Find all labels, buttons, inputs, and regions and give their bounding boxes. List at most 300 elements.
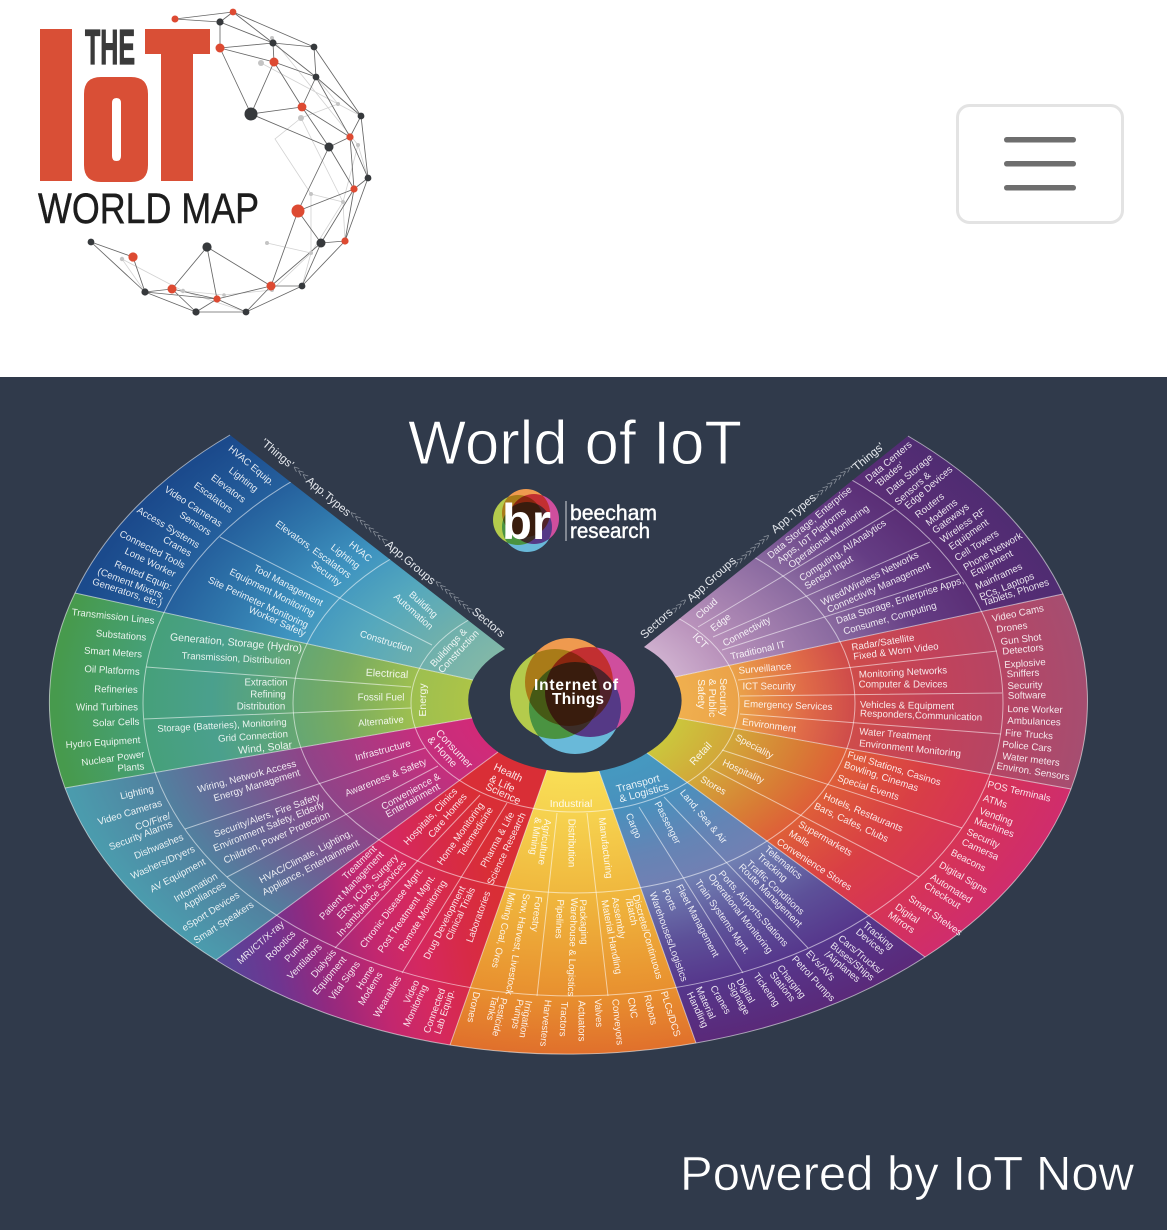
labels: transport: Material [693,985,717,1021]
central label [534,677,619,708]
panel: consumer and home [65,718,498,960]
labels: security: Monitoring Networks [859,665,948,681]
labels: security: Drones [996,620,1028,636]
panel: health and life science [216,752,547,1045]
labels: buildings: HVAC Equip. [226,444,276,488]
labels: buildings: Security [309,559,343,589]
labels: retail: Beacons [949,848,987,875]
labels: ICT: Cell Towers [953,528,1001,564]
labels: retail: Machines [973,816,1016,840]
labels: transport: Ticketing [750,971,782,1009]
labels: health: Lab Equip. [433,988,457,1036]
labels: health: Post Treatment Mgnt. [376,873,438,955]
labels: transport: Ports [659,887,679,913]
labels: health: Monitoring [401,983,431,1029]
labels: buildings: Escalators [191,480,235,516]
panel: buildings and construction [75,435,505,680]
labels: health: Pumps [283,935,311,965]
labels: security: Fire Trucks [1005,728,1053,742]
labels: security: Security [1007,680,1043,692]
labels: transport: & Logistics [618,781,670,805]
wedge: ICT [644,436,1063,677]
labels: security: Surveillance [738,661,792,677]
labels: security: Safety [695,679,707,710]
panel: energy [49,593,473,788]
labels: energy: Electrical [365,667,409,681]
labels: consumer: Energy Management [212,768,302,804]
labels: industrial: & Mining [527,817,543,855]
panel: transport and logistics [599,753,925,1043]
labels: retail: Malls [786,828,812,850]
labels: security: ICT Security [742,682,796,692]
labels: ICT: Tablets, Phones [982,577,1051,609]
edge caption right: >>> [670,596,690,616]
wedge: buildings [75,435,505,680]
labels: consumer: Information [172,871,220,905]
labels: health: Ventilators [285,942,325,982]
labels: transport: Land, Sea & Air [677,788,729,847]
labels: health [235,761,529,1036]
title: World of IoT [408,409,742,478]
labels: industrial: Drones [464,991,482,1024]
labels: health: Science [484,781,523,807]
labels: buildings: Automation [391,592,435,632]
panel: ICT [644,436,1063,677]
labels: energy: Fossil Fuel [358,692,404,704]
labels: ICT: Edge Devices [903,464,955,512]
labels: security: Environment [741,717,797,735]
labels: ICT: Routers [913,491,947,521]
labels: security: Sniffers [1006,668,1040,680]
labels: energy: Alternative [358,715,404,729]
labels: consumer: HVAC/Climate, Lighting, [258,828,354,886]
labels: buildings: Elevators [209,472,248,506]
labels: energy [65,607,429,775]
labels: industrial: Forestry [528,896,544,932]
chart: world of IoT fan [49,410,1087,1054]
labels: security: Ambulances [1007,716,1061,728]
labels: consumer: Dishwashes [133,832,185,862]
labels: energy: Nuclear Power [81,749,146,769]
labels: energy: Refining [250,690,286,700]
labels: security: Detectors [1002,642,1044,658]
central label: Things [552,691,604,708]
labels: retail: Retail [687,740,715,768]
labels: industrial: Manufacturing [596,817,614,879]
edge caption right: App.Types [769,492,819,536]
edge caption left: 'Things' [258,437,296,471]
labels: security [695,603,1070,783]
labels: energy: Transmission, Distribution [181,651,291,667]
labels: transport: Telematics [762,844,804,882]
labels: energy: Distribution [237,702,285,712]
labels: energy: Substations [95,628,147,644]
labels: buildings: Cranes [161,534,193,560]
logo word THE: THE [85,21,135,75]
labels: industrial: Irrigation [516,999,534,1039]
labels: ICT: Phone Network [962,531,1025,573]
labels: energy: Grid Connection [218,729,288,745]
labels: ICT: Computing, AI/Analytics [798,518,889,584]
logo: The IoT World Map [38,9,371,316]
labels: consumer: CO/Fire/ [134,811,172,833]
labels: security: Vehicles & Equipment [860,700,955,712]
labels: health: Chronic Disease Mgnt. [358,866,426,950]
labels: transport: Signage [724,981,752,1017]
labels: transport: Devices [853,927,887,957]
labels: transport: Fleet Management [673,883,721,960]
labels: consumer: Convenience & [380,771,443,813]
labels: ICT: ICT [690,631,711,652]
labels: retail: Special Events [836,773,900,803]
edge caption right: 'Things' [849,441,887,475]
edge caption left: Sectors [469,606,507,640]
labels: security: Security [717,678,729,717]
labels: retail: Vending [978,806,1014,828]
labels: health: Laboratories [465,890,493,944]
labels: retail: Automated [928,872,974,906]
labels: transport: Buses/Ships [828,940,876,984]
labels: ICT: Connectivity [721,615,773,649]
labels: retail: Camersa [960,837,1001,863]
labels: industrial: Distribution [566,819,576,867]
labels: consumer: Children, Power Protection [222,810,332,866]
labels: security: Software [1008,690,1046,702]
labels: buildings: Lighting [328,542,362,572]
labels: buildings [91,444,482,676]
labels: retail: Fuel Stations, Casinos [846,750,942,788]
labels: health: Home [354,964,378,992]
panel: industrial [450,770,696,1054]
labels: industrial: Warehouse & Logistics [565,897,579,997]
labels: security: Environ. Sensors [996,761,1070,783]
edge caption right: App.Groups [685,555,739,605]
labels: retail: Hotels, Restaurants [822,791,904,835]
wedge: energy [49,593,473,788]
labels: health: Drug Development [422,884,468,961]
labels: buildings: Generators, etc.) [91,577,163,609]
labels: transport: Train Systems Mgnt. [692,878,752,956]
labels: industrial: Conveyors [609,998,625,1046]
labels: consumer: Infrastructure [354,738,412,764]
logo big letters I o T [40,29,210,182]
labels: retail: Smart Shelves [906,893,964,939]
central label: Internet of [534,677,619,694]
labels: retail: Checkout [922,880,963,912]
labels: security: Radar/Satellite [851,633,915,653]
labels: consumer: eSport Devices [180,890,242,934]
labels: buildings: Sensors [177,510,213,538]
labels: health: In-ambulance Services [335,859,409,939]
labels: transport: EVs/AVs [803,949,837,984]
labels: consumer: Security Alarms [108,819,175,853]
labels: energy: Refineries [94,684,138,696]
white header background [0,0,1167,377]
labels: health: ERs, ICUs, Surgery [335,852,401,922]
labels: transport: Stations [767,970,797,1004]
beecham research wordmark: research [570,520,650,543]
labels: ICT: Gateways [930,502,972,536]
hamburger menu button [958,106,1122,222]
labels: retail: Mirrors [886,910,917,936]
labels: health: Dialysis [309,948,339,980]
labels: transport: Petrol Pumps [789,954,837,1004]
labels: ICT: Wired/Wireless Networks [819,549,921,608]
central badge: Internet of Things [510,638,635,754]
labels: industrial: Sow, Harvest, Livestock [503,892,531,996]
labels: transport: Handling [684,990,710,1030]
labels: buildings: Lighting [226,465,260,495]
labels: buildings: (Cement Mixers, [96,566,166,602]
labels: industrial: Actuators [576,1001,586,1042]
labels: ICT: Modems [924,497,960,529]
labels: transport: Route Management [736,862,804,930]
labels: retail: Hospitality [720,758,766,786]
labels: industrial: Tractors [557,1001,569,1037]
labels: transport: Cars/Trucks/ [836,933,885,977]
labels: transport: Charging [775,963,807,1001]
labels: buildings: Connected Tools [117,529,187,571]
labels: energy: Solar Cells [92,717,140,729]
labels: ICT: 'Blades' [874,460,906,490]
labels: consumer: AV Equipment [148,857,208,895]
labels: energy: Transmission Lines [71,607,155,627]
labels: transport: Operational Monitoring [705,872,775,956]
labels: retail: Stores [698,774,728,798]
edge caption left [258,437,507,640]
labels: ICT: Connectivity Management [826,560,933,616]
labels: transport: /Airplanes [822,949,862,985]
labels: consumer: Environment Safety, Elderly [212,800,326,854]
ring and wedge divider lines [49,410,1087,1054]
labels: buildings: HVAC [346,539,374,565]
labels: security: Police Cars [1002,739,1052,755]
labels: security: Responders,Communication [860,708,982,724]
labels: retail: POS Terminals [986,779,1052,805]
labels: industrial: Discrete/Continuous [630,894,664,981]
labels: retail [687,732,1052,939]
labels: industrial: Tanks [484,994,500,1022]
labels: ICT: Equipment [947,517,991,553]
labels: transport: Tracking [860,920,896,952]
labels: retail: Digital Signs [937,860,989,896]
labels: consumer: Appliance, Entertainment [261,838,362,898]
labels: security: Lone Worker [1007,704,1063,716]
labels: consumer: Consumer [433,727,475,771]
labels: health: Science Research [485,811,529,887]
labels: ICT: PCs, Laptops [978,571,1036,603]
labels: transport: Ports, Airports,Stations [716,869,790,949]
labels: ICT [690,439,1051,663]
logo: beecham research [493,489,657,552]
labels: transport: Transport [615,772,661,796]
labels: buildings: Rented Equip: [113,559,173,593]
labels: health: Wearables [372,974,404,1020]
labels: buildings: Construction [358,629,414,655]
wedge: transport [599,753,925,1043]
labels: industrial: Agriculture [535,818,553,866]
labels: consumer: Awareness & Safety [344,757,429,799]
labels: buildings: Site Perimeter Monitoring [206,575,310,631]
labels: energy: Generation, Storage (Hydro) [169,631,303,655]
edge caption left: App.Types [303,475,353,519]
labels: security: Video Cams [991,603,1045,625]
logo network globe [88,9,371,316]
labels: ICT: Data Centers [864,439,915,485]
labels: security: Gun Shot [1000,632,1042,648]
labels: ICT: Sensors & [893,470,934,508]
labels: consumer: Security/Alers, Fire Safety [213,792,322,840]
labels: security: Water Treatment [859,726,932,744]
labels: health: Care Homes [426,792,470,840]
labels: health: Equipment [311,954,349,997]
labels: buildings: Building [407,589,439,621]
labels: retail: Speciality [733,732,775,762]
labels: energy: Hydro Equipment [65,735,141,751]
labels: transport: Digital [734,977,756,1005]
labels: health: Pharma & Life [479,810,517,870]
labels: consumer: Smart Speakers [192,899,256,947]
labels: health: & Life [487,773,517,795]
labels: security: Computer & Devices [859,680,948,690]
labels: transport: Traffic Conditions [744,858,806,918]
wedge: health [216,752,547,1045]
labels: buildings: Equipment Monitoring [228,567,316,619]
edge caption right [638,441,887,642]
labels: transport: Cranes [707,984,733,1016]
labels: ICT: Operational Monitoring [787,503,871,571]
labels: ICT: Wireless RF [938,506,988,546]
labels: buildings: Access Systems [135,505,201,551]
edge caption right: Sectors [638,606,676,642]
labels: industrial: Pesticide [489,997,509,1037]
wedge: consumer [65,718,498,960]
labels: buildings: Construction [436,628,482,676]
labels: consumer: & Home [425,734,459,770]
labels: consumer [97,727,475,947]
labels: consumer: Entertainment [384,781,442,820]
labels: retail: ATMs [982,793,1009,811]
labels: health: Health [492,761,524,785]
labels: energy: Wind Turbines [76,702,138,714]
labels: ICT: Consumer, Computing [842,600,938,638]
labels: energy: Energy [417,683,429,717]
labels: industrial: Harvesters [537,999,553,1047]
labels: ICT: Data Storage, Enterprise [766,485,854,561]
labels: ICT: Mainframes [974,561,1024,593]
labels: ICT: Cloud [694,596,720,622]
labels: health: Vital Signs [327,959,363,1003]
edge caption left: <<< [290,463,310,483]
labels: ICT: Data Storage [885,452,935,498]
panel: retail [647,718,1071,957]
labels: consumer: Washers/Dryers [129,844,197,882]
labels: buildings: Worker Safety [247,605,307,640]
wedge: retail [647,718,1071,957]
labels: health: Telemedicine [456,805,496,859]
labels: consumer: Wiring, Network Access [196,758,298,795]
overlapping circles [510,638,635,754]
footer text: Powered by IoT Now [680,1148,1134,1201]
labels: security: & Public [706,679,718,717]
labels: industrial: Material Handling [598,899,624,975]
labels: retail: Bars, Cafes, Clubs [812,801,890,845]
labels: industrial: Valves [592,999,604,1028]
labels: health: Treatment [341,843,380,882]
edge caption right: >>>>>>>> [731,531,773,570]
labels: energy: Oil Platforms [84,664,140,678]
labels: industrial: /Batch [623,897,639,927]
labels: ICT: Data Storage, Enterprise Apps, [835,575,965,627]
labels: security: Fixed & Worn Video [853,641,939,663]
labels: health: Clinical Trials [444,886,478,942]
labels: retail: Digital [893,902,921,926]
labels: energy: Extraction [244,678,288,688]
labels: security: Explosive [1004,657,1046,671]
panel: security and public safety [675,594,1087,789]
labels: ICT: Traditional IT [729,639,787,663]
edge caption right: >>>>>>>> [812,464,855,502]
labels: transport [615,772,896,1030]
labels: health: Hospitals, Clinics [402,786,460,848]
labels: transport: Cargo [623,812,643,840]
labels: consumer: Lighting [119,784,155,802]
dark infographic background [0,377,1167,1230]
labels: energy: Storage (Batteries), Monitoring [157,717,287,735]
edge caption left: <<<<<<<< [432,578,475,616]
labels: industrial: Pumps [509,998,525,1030]
labels: buildings: Tool Management [251,563,325,609]
labels: transport: Warehouses/Logistics [647,891,689,983]
labels: health: MRI/CT/X-ray [235,919,287,967]
labels: transport: Tracking [755,852,789,884]
labels: consumer: Video Cameras [97,798,164,828]
labels: retail: Security [965,827,1001,851]
labels: energy: Wind, Solar [237,739,293,757]
labels: buildings: Video Cameras [162,484,224,530]
labels: health: Modems [356,970,386,1008]
labels: retail: Supermarkets [796,819,854,859]
labels: retail: Convenience Stores [774,837,854,893]
edge caption left: App.Groups [383,539,438,587]
labels: industrial: Assembly [609,896,627,940]
labels: industrial [464,798,682,1047]
labels: energy: Plants [117,761,145,775]
labels: retail: Bowling, Cinemas [842,760,920,794]
labels: ICT: Apps, IoT Platforms [775,505,849,566]
labels: buildings: Lone Worker [123,546,178,580]
beecham research wordmark [566,501,657,543]
icon: br overlapping circles [493,489,559,552]
labels: industrial: Robots [641,994,659,1026]
wedge: industrial [450,770,696,1054]
labels: security: Emergency Services [743,699,833,713]
labels: industrial: Packaging [577,899,589,945]
labels: industrial: PLCs/DCS [658,990,682,1039]
edge caption left: <<<<<<<< [347,509,390,547]
labels: health: Connected [422,987,448,1035]
labels: industrial: Mining Coal, Ores [489,891,517,969]
labels: industrial: CNC [625,997,639,1019]
labels: consumer: Appliances [182,879,228,913]
labels: security: Environment Monitoring [859,738,961,760]
labels: industrial: Pipelines [552,899,566,939]
logo words WORLD MAP: WORLD MAP [38,185,259,233]
labels: ICT: Sensor Input [803,554,855,592]
labels: health: Robotics [264,929,298,963]
labels: buildings: Elevators, Escalators [273,519,353,581]
labels: buildings: Buildings & [428,626,470,669]
